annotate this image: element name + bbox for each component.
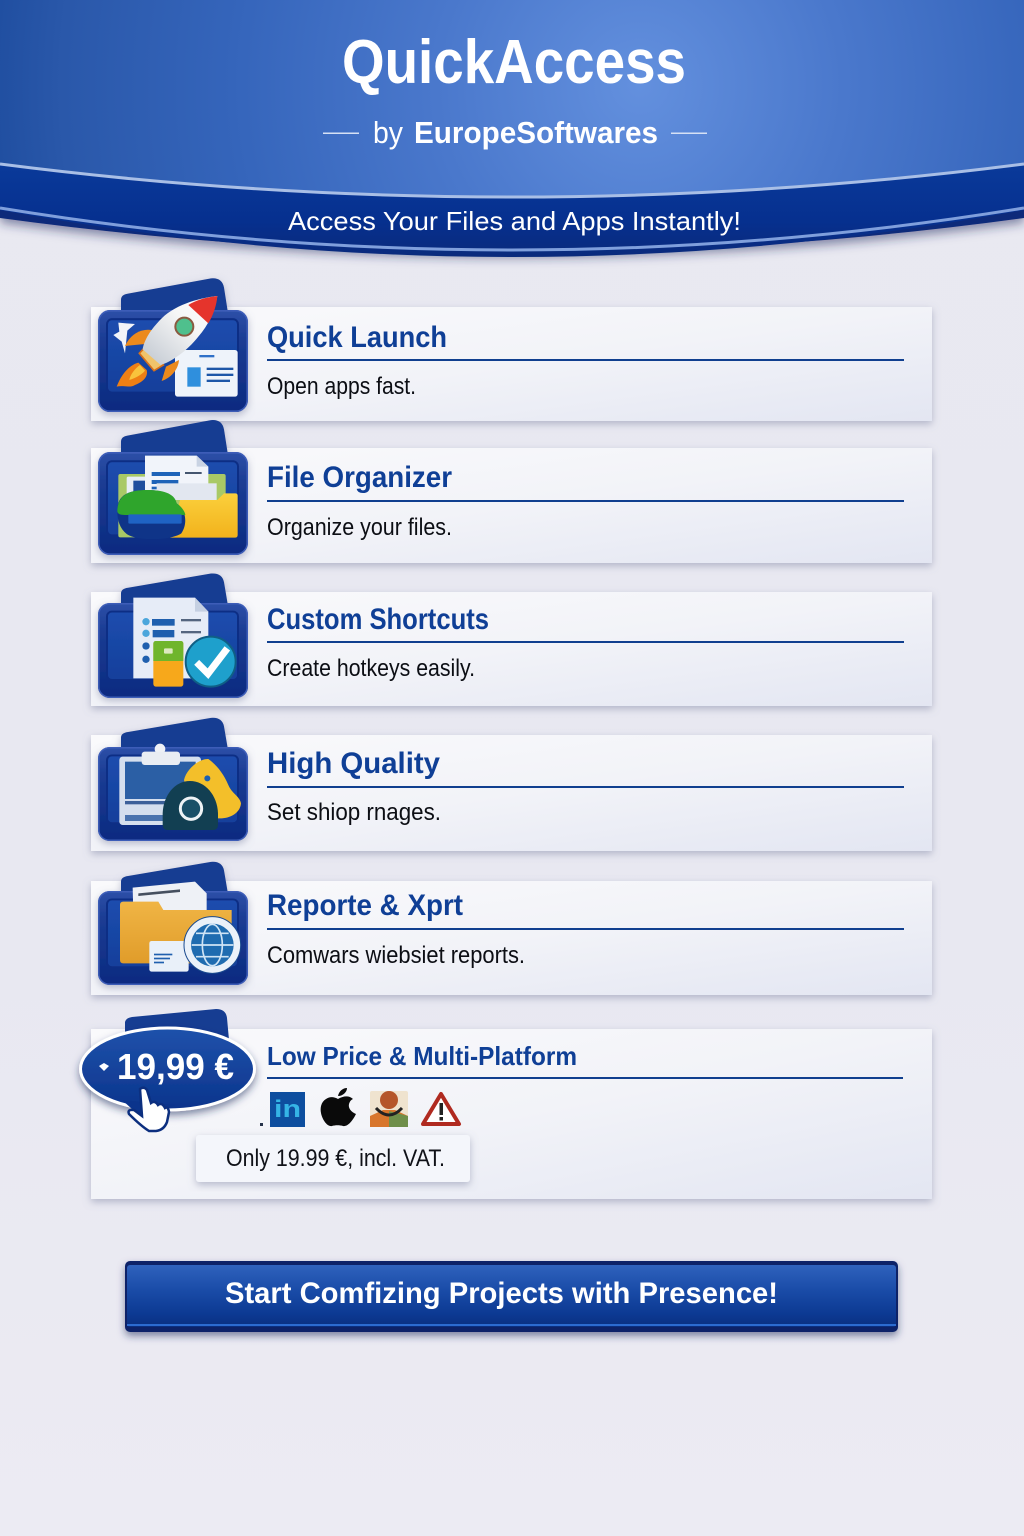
panel: reports and export bbox=[91, 862, 932, 995]
description: Comwars wiebsiet reports. bbox=[267, 942, 525, 969]
panel: quick launch bbox=[91, 278, 932, 421]
price badge: 19,99 € bbox=[117, 1046, 234, 1087]
tagline: Access Your Files and Apps Instantly! bbox=[288, 206, 741, 236]
panel: custom shortcuts bbox=[91, 573, 932, 706]
heading: File Organizer bbox=[267, 461, 452, 494]
description: Set shiop rnages. bbox=[267, 799, 441, 826]
subtitle bbox=[323, 115, 707, 150]
icon: person badge bbox=[370, 1091, 408, 1127]
price note bbox=[196, 1135, 470, 1182]
panel: low price and multi-platform bbox=[80, 1009, 932, 1199]
call to action button: Start Comfizing Projects with Presence! bbox=[225, 1277, 778, 1310]
price badge bbox=[80, 1028, 254, 1131]
ribbon band bbox=[0, 164, 1024, 257]
heading: Low Price & Multi-Platform bbox=[267, 1041, 577, 1071]
icon: warning triangle bbox=[423, 1094, 459, 1124]
platform icons bbox=[260, 1088, 459, 1127]
price note: Only 19.99 €, incl. VAT. bbox=[226, 1145, 445, 1172]
header banner bbox=[0, 0, 1024, 257]
icon: folder with files bbox=[117, 456, 238, 539]
icon: hand cursor bbox=[129, 1088, 169, 1131]
panel: file organizer bbox=[91, 420, 932, 563]
icon: document with checkmark bbox=[133, 598, 236, 687]
heading: Reporte & Xprt bbox=[267, 889, 463, 922]
icon: linkedin: in bbox=[274, 1096, 301, 1123]
heading: Custom Shortcuts bbox=[267, 603, 489, 636]
description: Organize your files. bbox=[267, 514, 452, 541]
subtitle: EuropeSoftwares bbox=[414, 115, 658, 150]
heading: High Quality bbox=[267, 747, 440, 780]
heading: Quick Launch bbox=[267, 321, 447, 354]
icon: folder with globe bbox=[120, 882, 241, 973]
icon: apple bbox=[321, 1088, 356, 1126]
description: Open apps fast. bbox=[267, 373, 416, 400]
icon: linkedin bbox=[270, 1092, 305, 1127]
icon: clipboard with camera bbox=[119, 744, 241, 830]
header blue field bbox=[0, 0, 1024, 197]
panel: high quality bbox=[91, 718, 932, 851]
call to action button bbox=[125, 1261, 898, 1332]
icon: rocket bbox=[113, 296, 238, 397]
title: QuickAccess bbox=[342, 28, 686, 97]
description: Create hotkeys easily. bbox=[267, 655, 475, 682]
subtitle: by bbox=[373, 115, 403, 150]
